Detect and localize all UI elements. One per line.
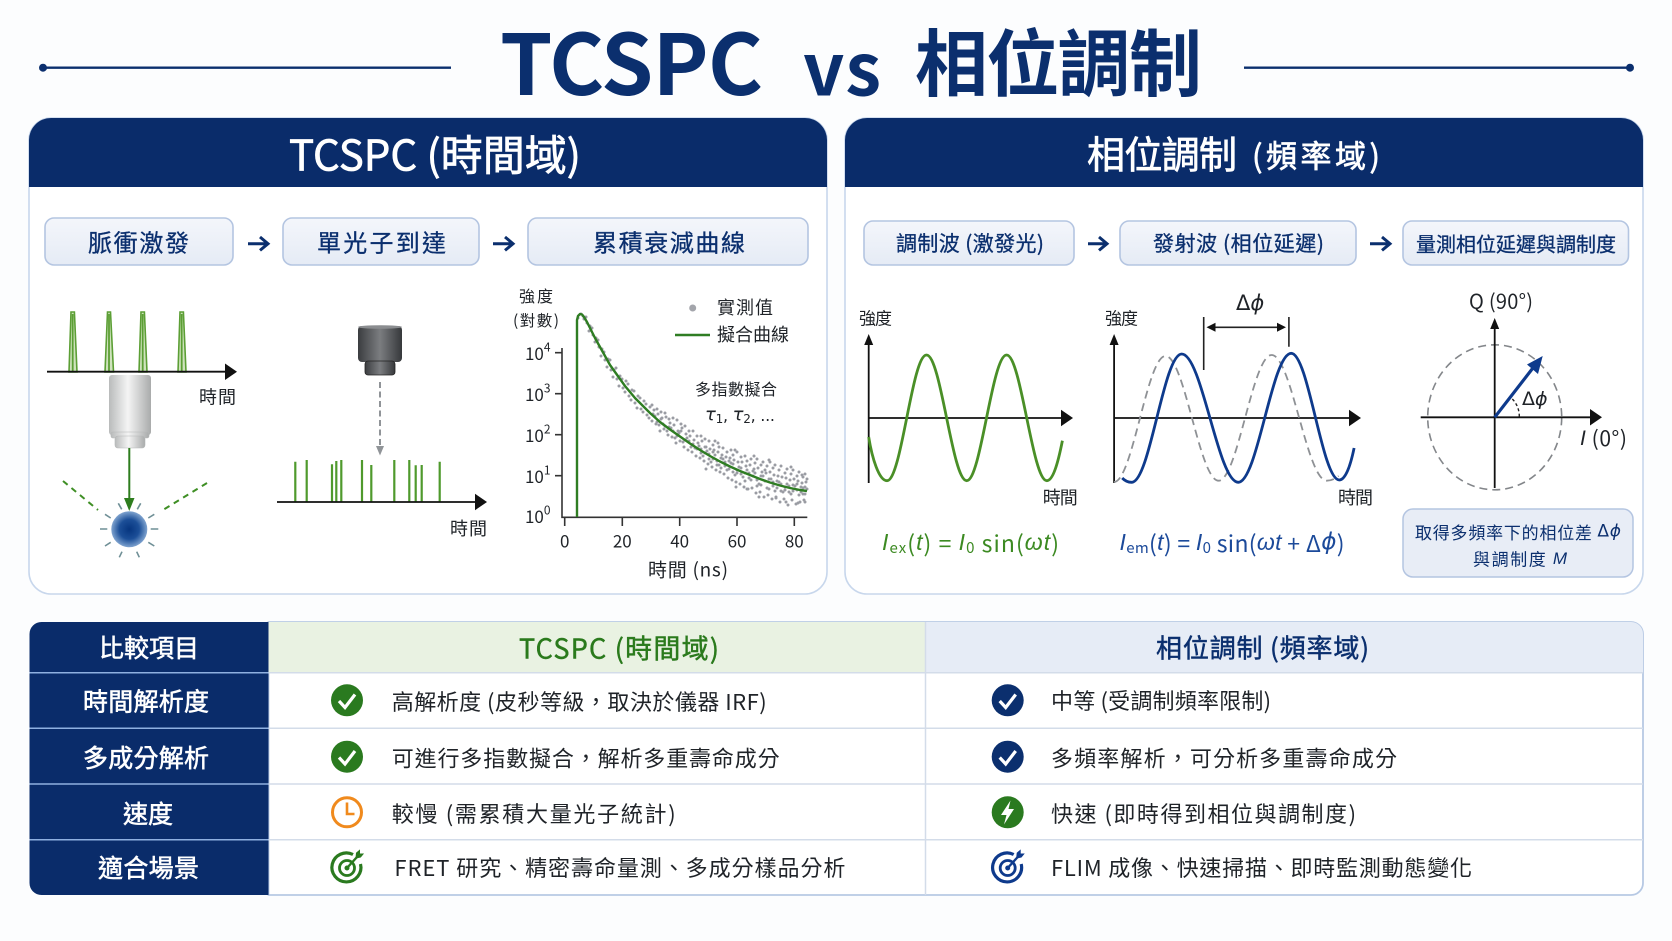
fit curve — [577, 314, 807, 517]
step: modulated wave — [864, 221, 1074, 265]
row headers column: 速度 — [123, 795, 173, 831]
formula: excitation: ex — [889, 536, 907, 558]
step: single photon arrival — [283, 218, 479, 265]
chart: excitation sine wave: 強度 — [859, 304, 892, 330]
row: speed — [332, 796, 1356, 829]
legend: 擬合曲線 — [717, 321, 789, 347]
chart: photon events: 時間 — [450, 515, 487, 541]
panel header: TCSPC — [29, 118, 827, 187]
arrow — [1088, 237, 1107, 250]
row headers column — [30, 622, 268, 895]
chart: decay curve: 1 — [544, 461, 551, 478]
formula: emission: ( — [1149, 525, 1157, 559]
formula: excitation — [882, 525, 1059, 559]
table background — [268, 622, 1643, 895]
row headers column: 適合場景 — [98, 849, 199, 885]
chart: excitation sine wave: 時間 — [1043, 484, 1078, 510]
row: suitable applications — [332, 850, 1472, 883]
dashed reference wave — [1114, 355, 1339, 482]
step: cumulative decay curve: 累積衰減曲線 — [593, 224, 745, 258]
chart: excitation sine wave — [859, 304, 1078, 510]
step: pulse excitation — [45, 218, 233, 265]
emission wave — [1122, 353, 1354, 482]
formula: emission: 0 — [1203, 536, 1211, 558]
chart: emission sine wave with phase shift: 時間 — [1338, 484, 1373, 510]
chart: decay curve: 10 — [525, 422, 544, 447]
legend — [675, 294, 789, 347]
annotation: multi exponential fit — [695, 376, 777, 426]
chart: excitation pulses — [47, 312, 237, 410]
phase shift marker: Δϕ — [1236, 291, 1264, 315]
icon: blue target — [993, 850, 1024, 882]
arrow: photon path — [376, 382, 384, 456]
phase shift marker — [1204, 291, 1289, 370]
icon: orange clock — [332, 798, 362, 827]
y axis labels: (對數) — [513, 309, 559, 331]
table header: phase modulation — [926, 622, 1643, 673]
step: single photon arrival: 單光子到達 — [317, 224, 446, 258]
icon: objective lens — [109, 375, 151, 448]
chart: photon events — [277, 460, 487, 541]
formula: emission: ωt + Δϕ) — [1257, 525, 1344, 559]
formula: emission: t) = I — [1157, 525, 1202, 559]
title rule right — [1244, 64, 1634, 72]
panel header: TCSPC: TCSPC (時間域) — [289, 122, 581, 184]
chart: decay curve: 10 — [525, 340, 544, 365]
chart: decay curve: 10 — [525, 503, 544, 528]
row headers column: 時間解析度 — [83, 682, 209, 718]
table header: phase modulation: 相位調制 (頻率域) — [1156, 628, 1369, 666]
row: speed: 快速 (即時得到相位與調制度) — [1051, 797, 1356, 829]
formula: emission: sin( — [1211, 525, 1257, 559]
annotation: multi exponential fit: , — [723, 406, 733, 424]
panel header: phase modulation: (頻率域) — [1252, 132, 1380, 176]
formula: excitation: I — [882, 529, 889, 555]
panel header: phase modulation — [845, 118, 1643, 187]
title: vs — [803, 12, 881, 116]
formula: excitation: 0 — [966, 536, 974, 558]
step: cumulative decay curve — [528, 218, 808, 265]
callout: multi frequency result: 取得多頻率下的相位差 Δϕ — [1415, 519, 1621, 544]
table header: TCSPC: TCSPC (時間域) — [519, 628, 719, 666]
formula: excitation: sin( — [975, 525, 1024, 559]
legend: 實測值 — [717, 294, 773, 320]
formula: excitation: ωt) — [1025, 525, 1059, 559]
formula: emission — [1120, 525, 1344, 559]
annotation: multi exponential fit: 多指數擬合 — [695, 376, 777, 400]
formula: excitation: ( — [907, 525, 915, 559]
arrow — [248, 237, 268, 250]
chart: IQ phasor diagram — [1421, 286, 1627, 490]
row: suitable applications: FRET 研究、精密壽命量測、多成分樣品分析 — [394, 851, 845, 883]
callout: multi frequency result — [1403, 509, 1633, 577]
dashed emission lines — [63, 481, 207, 510]
title — [500, 0, 1202, 120]
row: multi component analysis: 多頻率解析，可分析多重壽命成分 — [1051, 742, 1397, 774]
step: modulated wave: 調制波 (激發光) — [896, 228, 1044, 258]
row: time resolution: 中等 (受調制頻率限制) — [1051, 684, 1271, 716]
row: suitable applications: FLIM 成像、快速掃描、即時監測動態變化 — [1051, 851, 1472, 883]
chart: decay curve: 60 — [728, 528, 746, 552]
icon: blue check — [992, 684, 1024, 716]
icon: green check — [331, 684, 363, 716]
row headers column: 比較項目 — [99, 629, 199, 665]
panel: TCSPC time domain — [29, 118, 827, 594]
chart: excitation pulses: 時間 — [199, 384, 236, 410]
row: speed: 較慢 (需累積大量光子統計) — [392, 797, 676, 829]
annotation: multi exponential fit: , ... — [751, 406, 775, 424]
callout: multi frequency result: 與調制度 M — [1473, 546, 1568, 570]
formula: emission: I — [1120, 529, 1126, 555]
chart: decay curve: 10 — [525, 381, 544, 406]
icon: green target — [332, 850, 363, 882]
comparison table — [30, 622, 1643, 895]
title: TCSPC — [500, 0, 763, 120]
chart: emission sine wave with phase shift — [1105, 291, 1373, 510]
chart: decay curve: 0 — [560, 528, 569, 552]
arrow — [493, 237, 513, 250]
panel header: phase modulation: 相位調制 — [1087, 124, 1237, 180]
formula: excitation: t) = I — [916, 525, 965, 559]
row headers column: 多成分解析 — [83, 739, 209, 775]
icon: green check — [331, 741, 363, 773]
arrow: excitation beam — [124, 448, 134, 511]
chart: IQ phasor diagram: Δϕ — [1522, 388, 1548, 410]
step: emission wave: 發射波 (相位延遲) — [1153, 228, 1324, 258]
row: multi component analysis: 可進行多指數擬合，解析多重壽命成分 — [392, 742, 780, 774]
chart: decay curve: 3 — [544, 379, 551, 396]
chart: decay curve: 40 — [670, 528, 689, 552]
chart: decay curve — [513, 283, 807, 582]
formula: emission: em — [1126, 536, 1149, 558]
row: time resolution: 高解析度 (皮秒等級，取決於儀器 IRF) — [392, 685, 767, 717]
chart: IQ phasor diagram: Q (90°) — [1469, 286, 1533, 314]
annotation: multi exponential fit: 2 — [743, 412, 751, 426]
title: 相位調制 — [915, 6, 1202, 112]
chart: decay curve: 4 — [544, 338, 551, 355]
chart: decay curve: 20 — [613, 528, 632, 552]
y axis labels: 強度 — [519, 283, 553, 307]
chart: decay curve: 2 — [544, 420, 551, 437]
chart: decay curve: 80 — [785, 528, 804, 552]
step: measurement: 量測相位延遲與調制度 — [1416, 228, 1616, 258]
icon: photon detector — [358, 325, 402, 375]
icon: fluorophore — [100, 503, 158, 557]
step: emission wave — [1120, 221, 1356, 265]
chart: decay curve: 10 — [525, 463, 544, 488]
measured data scatter — [578, 314, 807, 505]
icon: green bolt — [992, 796, 1024, 828]
y axis labels — [513, 283, 559, 331]
step: measurement — [1403, 221, 1628, 265]
chart: decay curve: 0 — [544, 501, 551, 518]
chart: emission sine wave with phase shift: 強度 — [1105, 304, 1138, 330]
row: time resolution — [331, 684, 1271, 717]
title rule left — [39, 64, 451, 72]
row: multi component analysis — [331, 741, 1397, 774]
table header: TCSPC — [268, 622, 926, 673]
icon: blue check — [992, 741, 1024, 773]
step: pulse excitation: 脈衝激發 — [88, 224, 189, 258]
arrow — [1370, 237, 1390, 250]
annotation: multi exponential fit: τ — [733, 404, 743, 426]
panel: phase modulation frequency domain — [845, 118, 1643, 594]
annotation: multi exponential fit: 1 — [716, 412, 723, 426]
phasor arrow — [1495, 356, 1543, 417]
chart: IQ phasor diagram: I (0°) — [1580, 423, 1627, 453]
annotation: multi exponential fit: τ — [705, 404, 716, 426]
chart: decay curve: 時間 (ns) — [648, 556, 728, 582]
